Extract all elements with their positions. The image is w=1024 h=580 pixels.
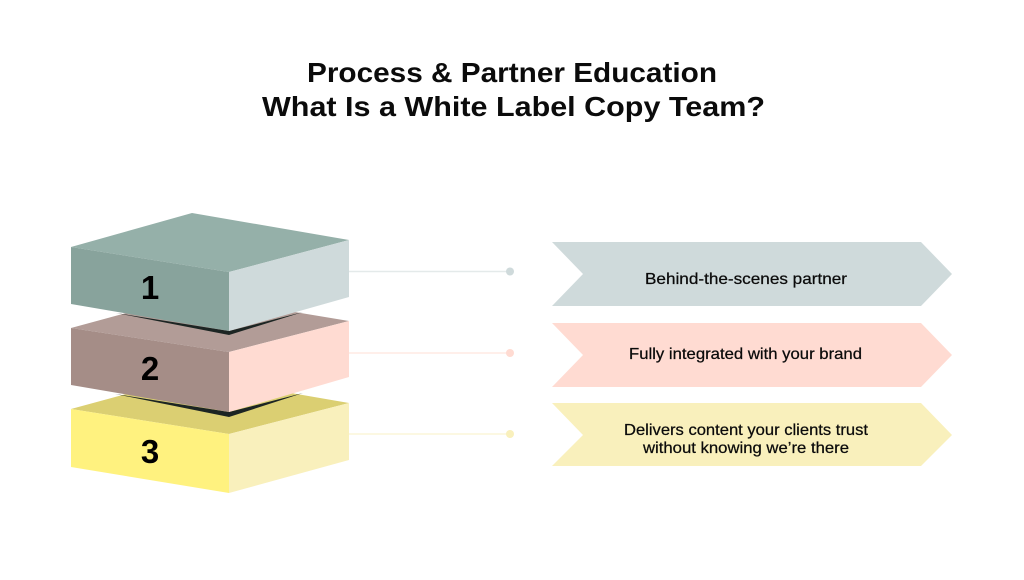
block 3: 3	[141, 433, 159, 470]
banner 3	[552, 403, 952, 466]
block 3	[71, 376, 349, 493]
banner 3: Delivers content your clients trust	[624, 422, 869, 439]
connector 3	[349, 430, 514, 438]
block 2	[71, 295, 349, 412]
connector 2	[349, 349, 514, 357]
block 1	[71, 213, 349, 331]
banner 3: without knowing we’re there	[642, 440, 849, 457]
shadow under block 2	[115, 393, 303, 417]
title: Process & Partner Education	[307, 57, 717, 88]
connector 1	[349, 268, 514, 276]
block 1: 1	[141, 269, 159, 306]
title	[262, 57, 765, 122]
block 2: 2	[141, 350, 159, 387]
banner 2	[552, 323, 952, 387]
banner 1	[552, 242, 952, 306]
stacked blocks	[71, 213, 349, 493]
shadow under block 1	[116, 312, 303, 335]
banner 1: Behind-the-scenes partner	[645, 271, 848, 288]
title: What Is a White Label Copy Team?	[262, 91, 765, 122]
banner 2: Fully integrated with your brand	[629, 346, 862, 363]
